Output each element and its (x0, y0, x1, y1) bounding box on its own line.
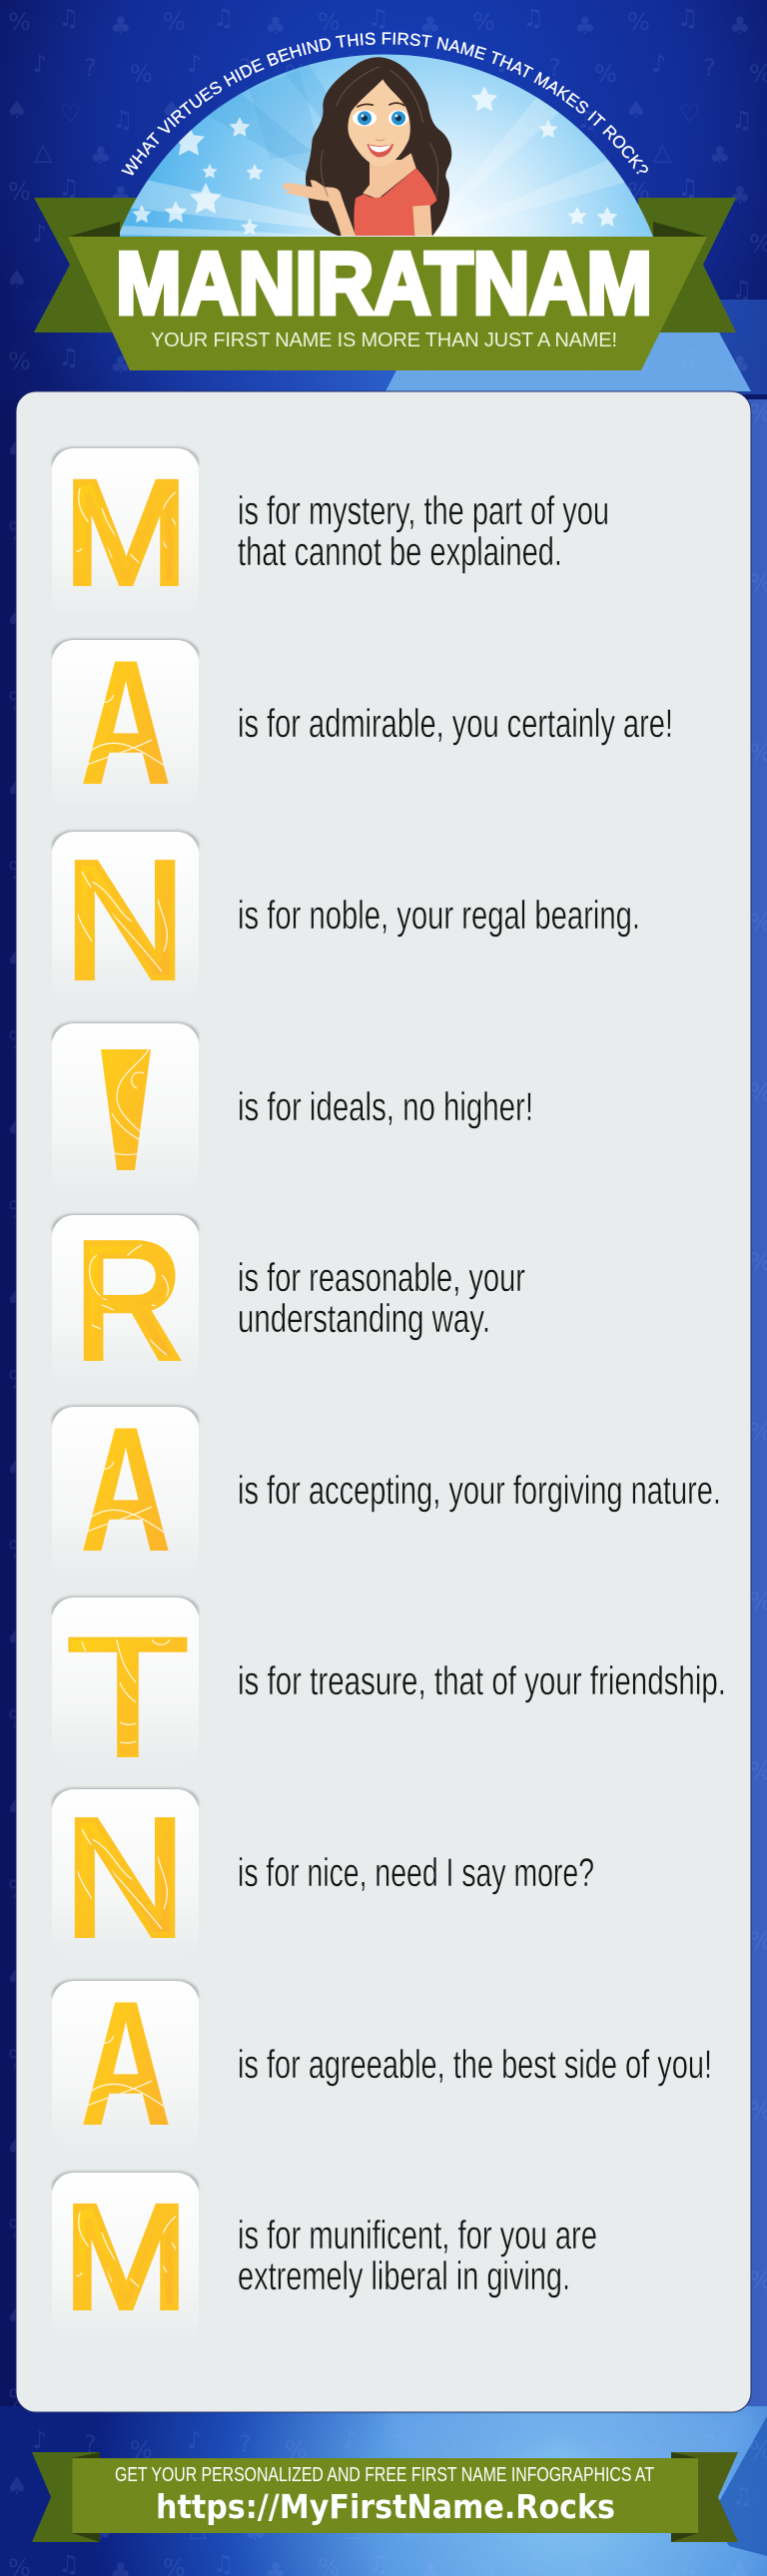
row R: reasonable (52, 1208, 525, 1394)
row R: reasonable: understanding way. (238, 1297, 490, 1341)
row M: munificent: extremely liberal in giving. (238, 2254, 570, 2298)
row N: nice: N (64, 1785, 186, 1971)
eyes (353, 110, 408, 126)
row T: treasure: T (65, 1602, 191, 1793)
face (348, 79, 410, 167)
row M: mystery (51, 445, 607, 586)
curved question text: WHAT VIRTUES HIDE BEHIND THIS FIRST NAME THAT MAKES IT ROCK? (121, 32, 648, 176)
row A: accepting: A (80, 1390, 172, 1589)
row T: treasure (52, 1596, 726, 1793)
ribbon tails (34, 198, 736, 332)
hair strands (321, 67, 438, 197)
row N: noble (52, 828, 640, 1013)
subtitle: YOUR FIRST NAME IS MORE THAN JUST A NAME! (151, 329, 617, 351)
row A: agreeable: A (80, 1964, 172, 2163)
row M: munificent: is for munificent, for you are (238, 2214, 597, 2257)
row M: mystery: M (64, 451, 188, 615)
row I: ideals: is for ideals, no higher! (238, 1085, 533, 1129)
row M: mystery: that cannot be explained. (238, 530, 562, 574)
sunburst dome (120, 54, 653, 237)
row N: nice (52, 1785, 594, 1971)
neck and chest (363, 153, 416, 199)
footer ribbon (32, 2452, 738, 2542)
row A: admirable: A (80, 623, 172, 822)
smile (367, 144, 393, 157)
nose (376, 139, 384, 141)
eyebrows (357, 103, 404, 107)
row R: reasonable: R (74, 1208, 184, 1394)
character (283, 57, 451, 236)
sleeve arm (412, 205, 432, 236)
main ribbon (68, 234, 707, 370)
row I: ideals: I (71, 1008, 181, 1209)
row N: nice: is for nice, need I say more? (238, 1851, 594, 1895)
row M: munificent: M (64, 2176, 188, 2339)
footer url: https://MyFirstName.Rocks (156, 2487, 615, 2526)
top (354, 168, 437, 236)
row R: reasonable: is for reasonable, your (238, 1256, 525, 1300)
row I: ideals (52, 1008, 533, 1209)
row M: munificent (51, 2170, 596, 2310)
row A: admirable (51, 637, 671, 784)
ribbon folds (68, 222, 707, 237)
name title: MANIRATNAM (116, 234, 652, 332)
row A: accepting (51, 1404, 719, 1551)
content panel (16, 391, 751, 2412)
row N: noble: N (64, 828, 186, 1013)
raised arm and hand (283, 180, 356, 236)
row A: agreeable (51, 1978, 709, 2125)
row M: mystery: is for mystery, the part of you (238, 489, 609, 533)
hair (306, 57, 451, 236)
